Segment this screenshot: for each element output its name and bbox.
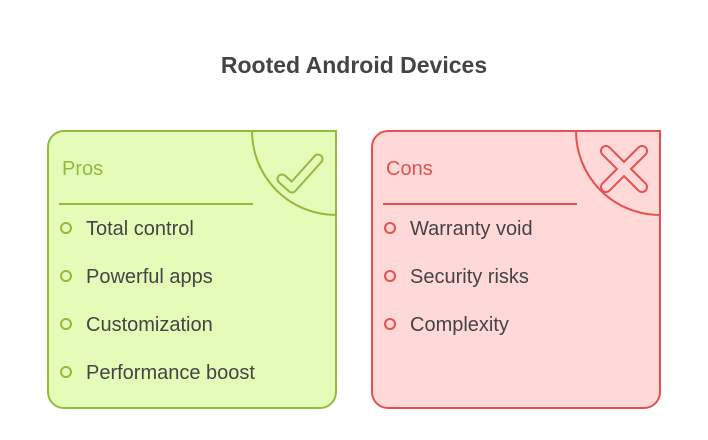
panel: cons (372, 131, 660, 408)
title: Rooted Android Devices (221, 52, 487, 78)
list: pros: Customization (86, 314, 213, 336)
heading: cons: Cons (386, 158, 433, 180)
list: cons: Warranty void (410, 218, 533, 240)
icon: check (282, 159, 318, 188)
list: pros (61, 218, 255, 384)
list: cons: Security risks (410, 266, 529, 288)
list: cons (385, 218, 533, 336)
list: pros: Powerful apps (86, 266, 213, 288)
panel: pros (48, 131, 336, 408)
heading: pros: Pros (62, 158, 103, 180)
list: cons: Complexity (410, 314, 509, 336)
list: pros: Total control (86, 218, 194, 240)
list: pros: Performance boost (86, 362, 255, 384)
icon: cross (606, 151, 642, 187)
